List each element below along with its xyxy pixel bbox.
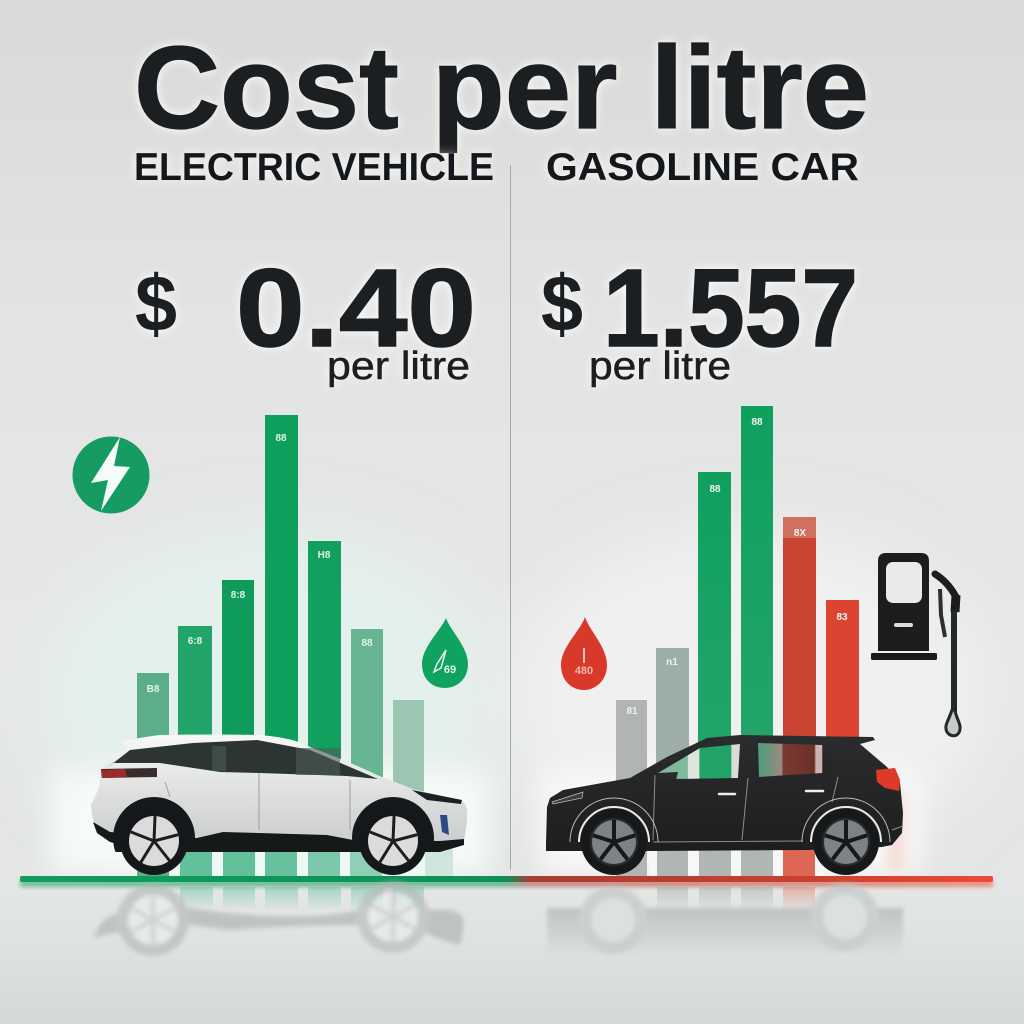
car: gasoline [546, 735, 903, 875]
center divider [510, 165, 512, 870]
price: gasoline car: $ [541, 259, 583, 348]
price: gasoline car [541, 247, 858, 388]
bar chart: electric vehicle: H8 [318, 550, 331, 561]
bar chart: gasoline car: 88 [751, 417, 763, 428]
heading: electric vehicle: ELECTRIC VEHICLE [134, 146, 494, 189]
price: electric vehicle: $ [135, 259, 177, 348]
bar chart: electric vehicle: 88 [275, 433, 287, 444]
bar chart: electric vehicle: 6:8 [188, 636, 203, 647]
bar chart: gasoline car: 88 [709, 484, 721, 495]
bar chart: gasoline car: 81 [626, 706, 638, 717]
icon: red fuel drop [561, 617, 607, 690]
bar chart: electric vehicle: 8:8 [231, 590, 246, 601]
bar chart: gasoline car [616, 406, 859, 877]
car: electric vehicle [91, 734, 467, 879]
reflection: bars [180, 887, 815, 909]
reflection: electric car [94, 881, 464, 956]
icon: green fuel drop [422, 618, 468, 688]
heading: gasoline car: GASOLINE CAR [546, 146, 859, 189]
icon: fuel pump [871, 553, 960, 736]
bar chart: gasoline car: n1 [666, 657, 678, 668]
bar chart: gasoline car: 8X [794, 528, 806, 539]
icon: green fuel drop: 69 [444, 664, 456, 676]
bar chart: electric vehicle [137, 415, 453, 877]
floor line [20, 876, 993, 887]
price: gasoline car: per litre [589, 345, 731, 388]
price: electric vehicle: 0.40 [236, 247, 476, 370]
bar chart: electric vehicle: 88 [361, 638, 373, 649]
bar chart: electric vehicle: B8 [147, 684, 160, 695]
price: gasoline car: 1.557 [603, 247, 858, 370]
reflection: gasoline car [547, 883, 903, 958]
price: electric vehicle: per litre [327, 345, 470, 388]
bar chart: gasoline car: 83 [836, 612, 848, 623]
icon: lightning bolt [72, 436, 150, 514]
title: Cost per litre [134, 22, 869, 153]
icon: red fuel drop: 480 [575, 665, 593, 677]
price: electric vehicle [135, 247, 476, 388]
